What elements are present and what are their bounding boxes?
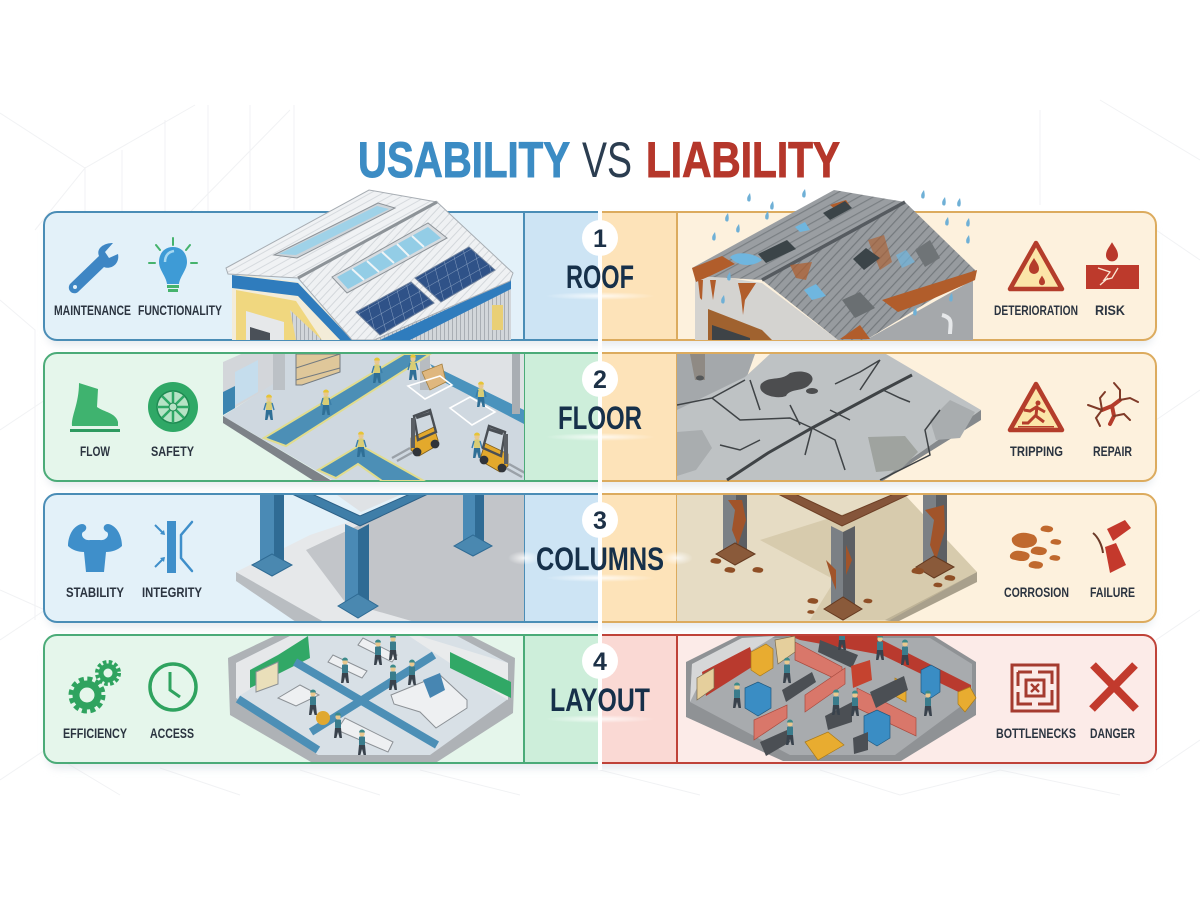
- row 4 center label: LAYOUT: [550, 682, 650, 718]
- title: LIABILITY: [646, 132, 840, 188]
- partition walls: [754, 642, 916, 740]
- solar panel: upper: [415, 247, 495, 302]
- row 2 panel: floor: [44, 353, 1156, 481]
- label: corrosion: CORROSION: [1004, 584, 1069, 600]
- icon: danger x: [1092, 665, 1136, 709]
- column: back left: [252, 494, 292, 576]
- row 4 panel: layout: [44, 635, 1156, 763]
- water pools: [730, 222, 915, 300]
- icon: risk: [1086, 242, 1139, 289]
- beams: [778, 494, 910, 526]
- icon: tripping warning: [1010, 384, 1062, 430]
- illustration: cracked floor: [677, 354, 981, 482]
- row 1 center label: [545, 220, 655, 300]
- label: repair: REPAIR: [1093, 443, 1132, 459]
- illustration: clean warehouse floor: [223, 354, 524, 481]
- icon: corrosion flakes: [1010, 526, 1061, 569]
- row 1 center label: 1: [593, 225, 607, 253]
- column: back right: [454, 494, 492, 556]
- title: [358, 132, 840, 188]
- cracks: [677, 360, 940, 480]
- red cabinet: [851, 660, 872, 688]
- illustration: strong steel columns: [236, 494, 524, 622]
- icon: tire: [148, 382, 198, 432]
- skylight: slope: [332, 223, 447, 293]
- label: failure: FAILURE: [1090, 584, 1135, 600]
- label: integrity: INTEGRITY: [142, 584, 203, 600]
- skylight: ridge: [274, 203, 395, 258]
- icon: failure: [1093, 520, 1131, 573]
- solar panel: lower: [356, 282, 434, 335]
- shelf: [256, 662, 278, 692]
- pipe: [942, 315, 951, 334]
- panel shadows: [46, 218, 1154, 769]
- blue machines: [745, 665, 940, 746]
- icon: gears: [71, 662, 119, 711]
- walkway: [264, 354, 430, 446]
- label: access: ACCESS: [150, 725, 194, 741]
- label: stability: STABILITY: [66, 584, 125, 600]
- panel: layout liability: [600, 635, 1156, 763]
- row 3 center label: COLUMNS: [536, 541, 664, 577]
- icon: repair crack: [1088, 383, 1138, 426]
- row 2 center label: 2: [593, 366, 607, 394]
- forklift: [316, 711, 330, 725]
- label: efficiency: EFFICIENCY: [63, 725, 128, 741]
- icon: clock: [150, 664, 196, 710]
- column: back left: [716, 494, 755, 565]
- label: deterioration: DETERIORATION: [994, 302, 1078, 318]
- title: USABILITY: [358, 132, 570, 188]
- row 4 center label: [545, 643, 655, 723]
- lower walkway: [318, 445, 424, 481]
- workstations: [278, 638, 467, 752]
- row 3 center label: [508, 502, 693, 582]
- illustration: maintained roof: [226, 190, 513, 340]
- center divider: [598, 205, 602, 770]
- icon: deterioration warning: [1010, 243, 1062, 289]
- machine: [423, 673, 445, 698]
- rain drops: [712, 189, 970, 316]
- panel: roof liability: [600, 212, 1156, 340]
- background grid pattern: [0, 100, 1200, 795]
- illustration: efficient layout: [228, 622, 515, 762]
- column: front: [824, 526, 862, 620]
- icon: flexed arm: [68, 524, 122, 572]
- label: functionality: FUNCTIONALITY: [138, 302, 222, 318]
- illustration: damaged roof: [692, 190, 977, 340]
- panel: columns usability: [44, 494, 600, 622]
- oil stain: [760, 371, 813, 397]
- icon: wrench: [69, 243, 118, 293]
- column: back right: [916, 494, 954, 578]
- illustration: chaotic layout: [686, 624, 976, 761]
- row 3 center label: 3: [593, 507, 607, 535]
- aisles: [238, 655, 437, 750]
- workers: [309, 634, 416, 755]
- label: risk: RISK: [1095, 302, 1125, 318]
- icon: maze: [1012, 665, 1058, 711]
- beams: [292, 494, 428, 526]
- row 1 panel: roof: [44, 212, 1156, 340]
- forklift: right: [480, 426, 527, 477]
- panel: floor liability: [600, 353, 1156, 481]
- rust patches: [692, 200, 977, 339]
- panel: floor usability: [44, 353, 600, 481]
- panel: roof usability: [44, 212, 600, 340]
- row 3 panel: columns: [44, 494, 1156, 622]
- row 4 center label: 4: [593, 648, 607, 676]
- label: maintenance: MAINTENANCE: [54, 302, 131, 318]
- workers: [733, 624, 932, 745]
- icon: light bulb: [149, 238, 197, 292]
- column: front: [338, 524, 378, 618]
- row 1 center label: ROOF: [566, 259, 634, 295]
- shelving: [296, 354, 340, 385]
- label: flow: FLOW: [80, 443, 111, 459]
- label: bottlenecks: BOTTLENECKS: [996, 725, 1076, 741]
- icon: integrity: [155, 521, 192, 573]
- desks: [760, 640, 908, 756]
- rust chips: [710, 558, 955, 614]
- roof holes: [758, 201, 940, 318]
- row 2 center label: [545, 361, 655, 441]
- panel: columns liability: [600, 494, 1156, 622]
- panel: layout usability: [44, 635, 600, 763]
- pallet with boxes: [408, 364, 495, 425]
- illustration: corroded columns: [677, 494, 977, 622]
- row 2 center label: FLOOR: [558, 400, 642, 436]
- shelves: [697, 636, 795, 700]
- label: danger: DANGER: [1090, 725, 1135, 741]
- forklift: left: [392, 410, 439, 461]
- label: safety: SAFETY: [151, 443, 195, 459]
- icon: boot: [70, 383, 120, 432]
- title: VS: [582, 132, 632, 188]
- label: tripping: TRIPPING: [1010, 443, 1063, 459]
- yellow cabinets: [751, 644, 976, 760]
- workers: [264, 354, 486, 458]
